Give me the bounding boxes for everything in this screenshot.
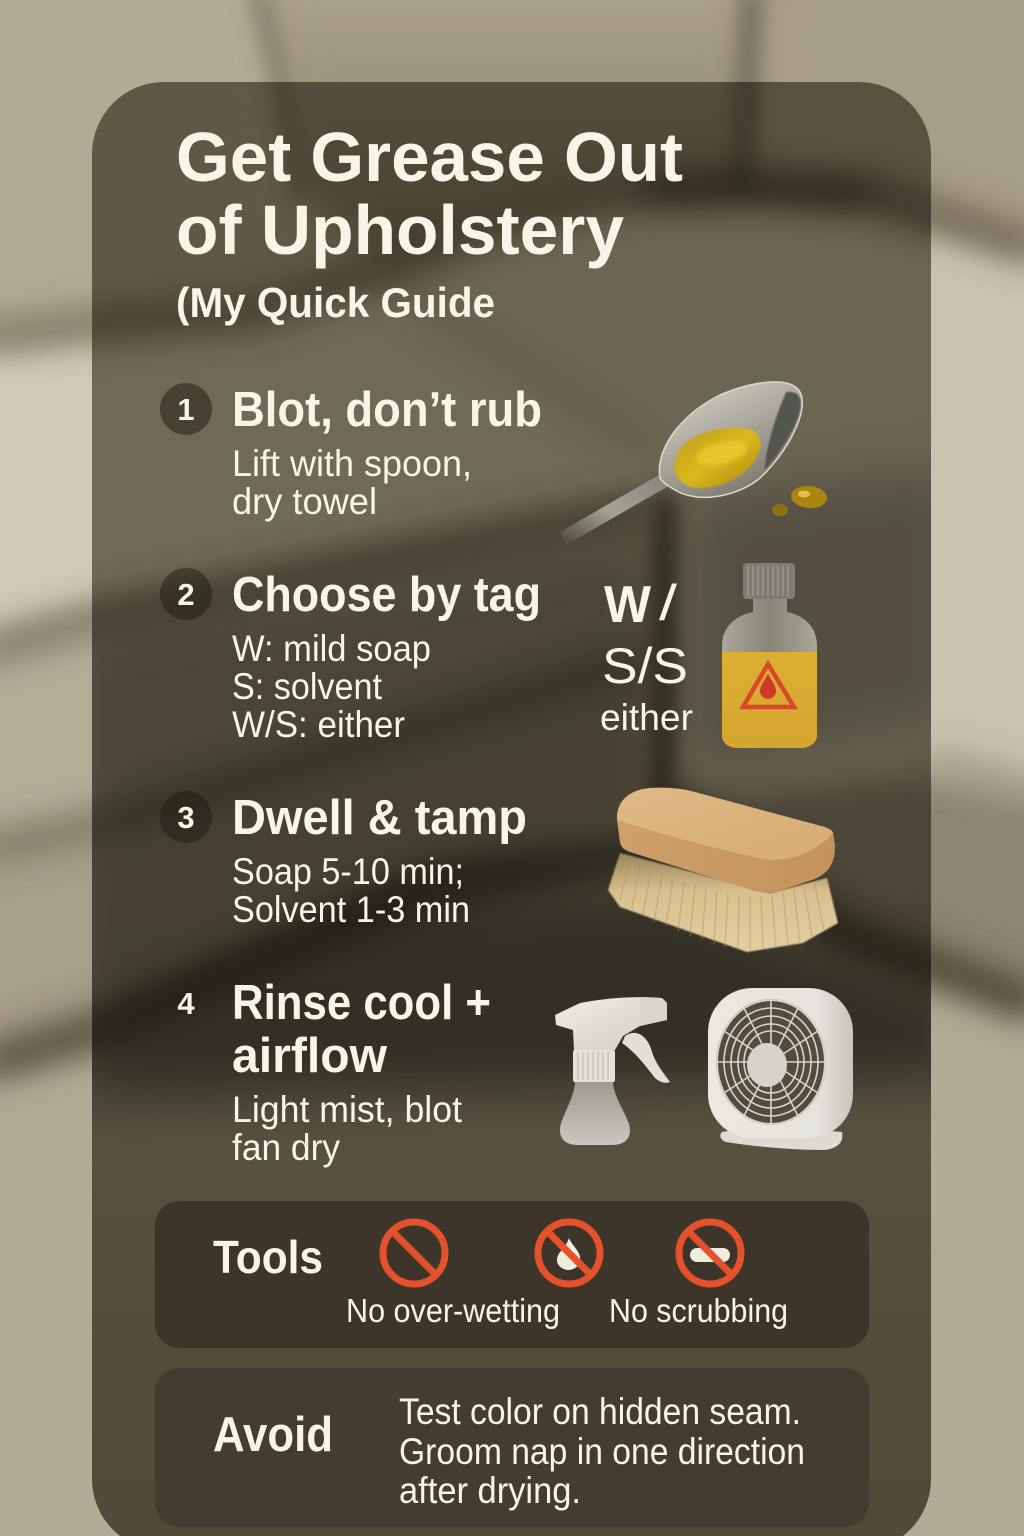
step 3 heading: Dwell & tamp — [232, 791, 527, 845]
fabric tag label W/S: S/S — [602, 638, 688, 694]
fabric tag label W/S — [600, 575, 693, 738]
number badge 2: 2 — [177, 577, 195, 612]
number badge 3 — [160, 791, 212, 843]
step 1: blot — [160, 383, 542, 522]
number label 4: 4 — [177, 986, 195, 1021]
icon: spoon with grease — [560, 382, 828, 545]
step 3 text: Solvent 1-3 min — [232, 889, 470, 930]
label: no over-wetting: No over-wetting — [346, 1292, 560, 1329]
step 1 text: Lift with spoon, — [232, 443, 472, 484]
subtitle: (My Quick Guide — [176, 279, 495, 326]
main translucent guide panel — [92, 82, 931, 1536]
label: no scrubbing: No scrubbing — [609, 1292, 788, 1329]
icon: desk fan — [708, 988, 853, 1150]
number badge 2 — [160, 568, 212, 620]
icon: prohibited scrub pad — [679, 1222, 741, 1284]
step 4: rinse and airflow — [177, 976, 491, 1168]
step 4 heading — [232, 976, 491, 1083]
title — [176, 118, 683, 269]
step 2 text: W/S: either — [232, 704, 405, 745]
avoid text — [399, 1391, 805, 1511]
tools heading: Tools — [213, 1231, 323, 1283]
fabric tag label W/S: / — [659, 575, 677, 631]
avoid text: Test color on hidden seam. — [399, 1391, 801, 1432]
step 4 text: Light mist, blot — [232, 1089, 463, 1130]
step 3 text — [232, 851, 470, 930]
step 1 text: dry towel — [232, 481, 377, 522]
avoid heading: Avoid — [213, 1408, 333, 1462]
avoid text: Groom nap in one direction — [399, 1431, 805, 1472]
step 2: choose by tag — [160, 568, 541, 745]
step 3: dwell and tamp — [160, 791, 527, 930]
step 4 text — [232, 1089, 463, 1168]
step 1 heading: Blot, don’t rub — [232, 383, 542, 437]
step 2 text: S: solvent — [232, 666, 383, 707]
icon: spray bottle — [555, 997, 670, 1145]
panel: tools and warnings — [155, 1201, 869, 1348]
step 4 heading: Rinse cool + — [232, 976, 491, 1030]
step 2 text — [232, 628, 431, 745]
step 4 text: fan dry — [232, 1127, 340, 1168]
step 3 text: Soap 5-10 min; — [232, 851, 464, 892]
fabric tag label W/S: either — [600, 697, 693, 738]
icon: prohibited flame — [538, 1222, 600, 1284]
fabric tag label W/S: W — [604, 576, 652, 634]
number badge 3: 3 — [177, 800, 195, 835]
step 2 text: W: mild soap — [232, 628, 431, 669]
step 2 heading: Choose by tag — [232, 568, 541, 622]
step 4 heading: airflow — [232, 1029, 388, 1083]
title: of Upholstery — [176, 191, 624, 269]
icon: prohibited blank — [383, 1222, 445, 1284]
number badge 1 — [160, 383, 212, 435]
step 1 text — [232, 443, 472, 522]
icon: wooden brush — [608, 788, 838, 952]
icon: solvent bottle with warning — [722, 563, 817, 748]
panel: avoid — [155, 1368, 869, 1527]
avoid text: after drying. — [399, 1470, 581, 1511]
panel shading — [80, 470, 960, 1536]
number badge 1: 1 — [177, 392, 195, 427]
title: Get Grease Out — [176, 118, 683, 196]
